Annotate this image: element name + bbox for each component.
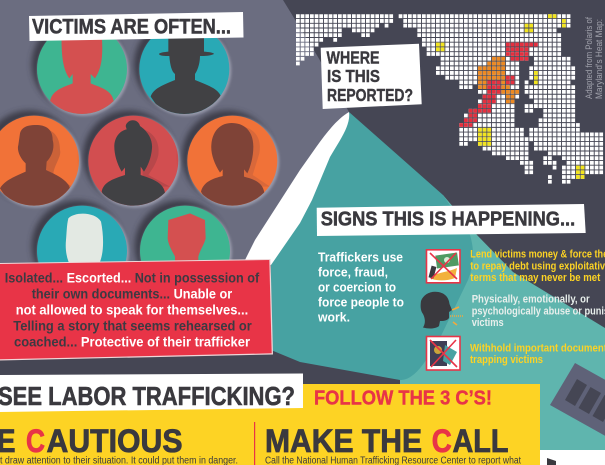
text: physically emotionally abuse: victims (472, 317, 504, 329)
source line 2: Maryland's Heat Map: (594, 19, 604, 99)
heading: victims are often: VICTIMS ARE OFTEN... (32, 16, 231, 38)
portrait: green circle red figure (132, 198, 233, 261)
map: white cells (296, 16, 604, 182)
heading: signs this is happening: SIGNS THIS IS HAPPENING... (321, 209, 575, 231)
icon: shipping container (550, 363, 605, 447)
source note (584, 17, 604, 99)
map: yellow cells (436, 16, 585, 177)
map: red cells (459, 45, 539, 125)
portrait: red circle woman with bun (83, 110, 180, 208)
description text: their own documents... Unable or (32, 285, 233, 301)
heading: make the call: C (432, 423, 452, 459)
heading text: IS THIS (327, 66, 380, 86)
text: physically emotionally abuse (472, 293, 605, 329)
portrait: orange circle man (0, 110, 81, 208)
text: traffickers use force: or coercion to (318, 280, 396, 295)
description text: Telling a story that seems rehearsed or (13, 317, 252, 333)
text: traffickers use force: Traffickers use (318, 250, 403, 265)
description text: coached... Protective of their trafficker (14, 334, 251, 350)
map: orange cells (478, 59, 520, 101)
portrait: teal circle light figure (29, 198, 130, 262)
portrait: green circle woman (29, 40, 130, 117)
panel: grey left background (0, 0, 349, 266)
text: traffickers use force: force, fraud, (318, 265, 388, 280)
banner: see labor trafficking (0, 374, 303, 412)
text: lend victims money (470, 249, 605, 284)
heading: signs this is happening (317, 204, 586, 236)
heading: make the call: ALL (452, 423, 508, 459)
description text (5, 269, 259, 350)
icon: crossed out passport (426, 336, 460, 370)
panel: light teal beam (400, 195, 605, 465)
text: traffickers use force: force people to (318, 295, 404, 310)
icon: shouting head (421, 292, 463, 328)
heading: make the call (265, 423, 508, 459)
panel: dark teal beam (271, 112, 473, 380)
description text: not allowed to speak for themselves... (16, 301, 248, 317)
banner: see labor trafficking: SEE LABOR TRAFFICKING? (0, 381, 295, 411)
heading: be cautious: AUTIOUS (46, 423, 182, 459)
panel: red victim description (0, 259, 273, 360)
panel: white corner (540, 450, 605, 465)
heat map of Maryland (296, 16, 604, 182)
icon: corner fragment (547, 458, 556, 465)
panel: yellow follow the 3 Cs (0, 384, 540, 465)
portrait: teal circle man with hat (131, 38, 232, 117)
heading text: REPORTED? (327, 85, 413, 105)
text: withhold documents: trapping victims (470, 354, 543, 366)
icon: crossed out money (426, 250, 460, 283)
divider: columns (254, 422, 255, 465)
heading text (326, 48, 413, 105)
heading: make the call: MAKE THE (265, 423, 422, 459)
description text: Isolated... Escorted... Not in possession of (5, 269, 259, 285)
heading: follow the 3 Cs: FOLLOW THE 3 C’S! (314, 387, 492, 409)
text: physically emotionally abuse: Physically, emotionally, or (472, 293, 590, 305)
heading text: WHERE (326, 48, 380, 68)
callout: where is this reported (321, 44, 422, 109)
beam highlight: white (245, 112, 349, 265)
text: withhold documents (470, 343, 605, 366)
heading: be cautious: C (26, 423, 45, 459)
source line 1: Adapted from Polaris of (584, 17, 594, 99)
text: traffickers use force (317, 250, 404, 325)
text: traffickers use force: work. (317, 310, 350, 325)
portrait: orange circle woman (182, 110, 279, 208)
